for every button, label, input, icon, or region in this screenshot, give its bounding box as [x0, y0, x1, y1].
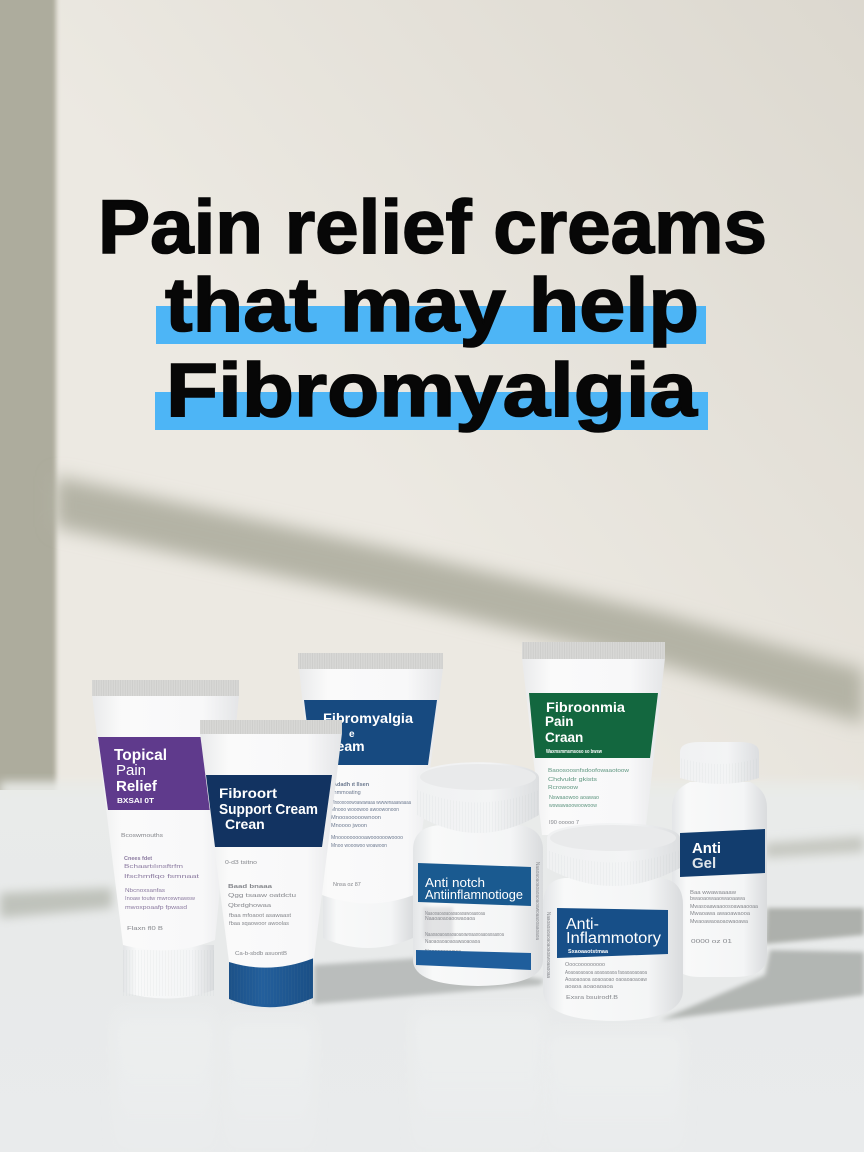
small print: Exsra bsuirodf.B	[566, 995, 618, 1001]
small print: Aoaoaoaoa aoaoaoao oaoaoaoaoaw	[565, 977, 647, 983]
cap	[123, 945, 214, 999]
small print: Mnoooo jwoon	[331, 823, 367, 829]
bottle: Anti Gel	[672, 742, 767, 977]
small print: Naaoaoaoaoowaoaoa	[425, 916, 476, 922]
band text: Fibroonmia	[546, 700, 626, 715]
jar: Anti-Inflammatory large	[543, 823, 683, 1021]
small print: Mnoosooooownoon	[331, 815, 381, 821]
small print: Naaoaoaoaoaoaoaoawoaaooaa	[545, 912, 551, 979]
band text: Relief	[116, 778, 158, 795]
jar cap	[417, 762, 539, 833]
band text: Waxmsmmsmsoso so bwsw	[546, 749, 603, 755]
small print	[423, 862, 540, 955]
small print: Adadh ıt Ilsen	[333, 782, 370, 788]
label text	[425, 875, 523, 902]
crimp	[200, 720, 342, 734]
small print: fbaa sqaowoor awoolas	[229, 921, 289, 927]
small print: Mwaoawa awaoawaooa	[690, 911, 751, 917]
jar body	[543, 878, 683, 1021]
label text: Anti notch	[425, 875, 485, 890]
small print: Naaooaoaoaoaoaoaoawoaaooaa	[425, 911, 486, 917]
crimp	[298, 653, 443, 669]
body	[522, 658, 665, 835]
band text: Fibroort	[219, 785, 277, 801]
small print: Baa wwawaaaaw	[690, 890, 736, 896]
blue label	[418, 863, 531, 906]
small print: Naaoaoaoaoaoaoaoawoaaooaaoaoaaooa	[425, 932, 505, 938]
small print: Aoaoaoaoaoa aoaoaoaoa faoaoaoaoaoa	[565, 970, 648, 976]
small print: I90 ooooo 7	[549, 820, 579, 826]
navy band	[206, 775, 332, 847]
label text: Sxaoaaotstmaa	[568, 949, 609, 955]
label text	[566, 916, 661, 955]
small print: Ifschmflqo fsmnaat	[124, 874, 200, 880]
tube: Topical Pain Relief	[92, 680, 239, 999]
small print: aoaoa aoaoaoaoa	[565, 984, 614, 990]
navy band	[304, 700, 437, 765]
small print: mmmoating	[332, 790, 361, 796]
small print: Chdvuldr gkists	[548, 777, 597, 783]
crimp	[522, 642, 665, 659]
small print: bwaoaowaaowaoaawa	[690, 896, 746, 902]
blue bottom strip	[416, 950, 531, 970]
small print: wswawaoowoowoow	[548, 803, 597, 809]
small print: Bchaartılınsftrfm	[124, 864, 184, 870]
small print: Naaoaoaoaoaoaoaoawoaaooaaoaoa	[534, 862, 540, 941]
small print: Mwasoaawaaoosoawaaooaa	[690, 904, 759, 910]
title text: Fibromyalgia	[166, 348, 698, 433]
small print: mwoxpoaafp fpwasd	[125, 905, 187, 911]
small print	[121, 833, 200, 932]
small print: Ca-b-sbdb asuontB	[235, 951, 287, 957]
small print: Nswaaowoo aoawao	[549, 795, 599, 801]
small print: Nbcnoxsanfas	[125, 888, 165, 894]
band text	[219, 785, 318, 832]
band text: e	[349, 729, 355, 740]
body	[92, 695, 239, 950]
band text: Pain	[545, 714, 574, 729]
band text	[114, 747, 167, 805]
title text: that may help	[165, 263, 699, 348]
blue label	[557, 908, 668, 958]
label text: Antiinflamnotioge	[425, 888, 523, 902]
tube: Fibromyalgia Cream (back)	[298, 653, 443, 948]
small print: Cnees fdet	[124, 856, 152, 862]
reflections	[115, 1005, 215, 1152]
small print: Naoaoaoaoaoawaoaoaoa	[425, 939, 481, 945]
band text: Topical	[114, 747, 167, 764]
label text	[692, 840, 721, 872]
small print: Baoosoosnfsdoofowaaotoow	[548, 768, 629, 774]
small print: Nnsa oz 87	[333, 882, 361, 888]
small print: 0-d3 tsitno	[225, 860, 257, 866]
small print	[225, 860, 296, 957]
jar: Anti-inflammatory small label	[413, 762, 543, 986]
label text: Anti	[692, 840, 721, 857]
small print: Rcrowoow	[548, 785, 578, 791]
tube: Fibroort Support Cream	[200, 720, 342, 1007]
wall background	[0, 0, 864, 810]
band text: Crean	[225, 816, 265, 832]
table surface	[0, 782, 864, 1152]
band text	[321, 710, 413, 754]
band text: Support Cream	[219, 801, 318, 818]
body	[672, 782, 767, 977]
small print: Inoaw toutw mwroxwnawsw	[125, 896, 195, 902]
small print: 0000 oz 01	[691, 939, 732, 945]
band text: Craan	[545, 730, 583, 745]
small print	[548, 768, 629, 826]
blue cap	[229, 958, 313, 1007]
small print: Ooocooooooooo	[565, 962, 605, 968]
title	[98, 185, 767, 433]
small print	[545, 912, 648, 1001]
title text	[98, 185, 767, 433]
navy label	[680, 829, 765, 877]
crimp	[92, 680, 239, 696]
purple band	[98, 737, 212, 810]
body	[200, 733, 342, 968]
small print: Qgg tsaaw oatdctu	[228, 893, 296, 899]
body	[299, 668, 443, 904]
small print: fbaa mfoaoot asawaast	[229, 913, 292, 919]
small print: Bcoswmouths	[121, 833, 163, 839]
band text: Cream	[321, 738, 365, 754]
title text: Pain relief creams	[98, 185, 767, 270]
small print: Naaoaoaoaowa	[425, 949, 462, 955]
small print	[331, 782, 412, 888]
tube: Fibroonmia Pain Cream	[522, 642, 665, 835]
green band	[529, 693, 658, 758]
band text: BXSAI 0T	[117, 796, 154, 805]
jar body	[413, 825, 543, 986]
band text	[545, 700, 626, 755]
small print: Mnoooooowoawawaaa wwwwnaaawaaaa	[331, 800, 412, 806]
cap	[323, 895, 413, 948]
band text: Pain	[116, 762, 146, 779]
band text: Fibromyalgia	[323, 710, 413, 726]
small print: Qbrdghowaa	[228, 903, 272, 909]
small print: Mnoooooooooawoooooowoooo	[331, 835, 403, 841]
small print: Mnoo wooowoo woawoon	[331, 843, 387, 849]
label text: Gel	[692, 855, 716, 872]
cap	[680, 742, 759, 784]
small print: Mnooo wooowoo awoowonoon	[331, 807, 399, 813]
jar cap	[547, 823, 680, 886]
label text: Anti-	[566, 916, 599, 933]
highlight bar: line 2	[156, 306, 706, 344]
small print: Baad bnaaa	[228, 884, 273, 890]
highlight bar: line 3	[155, 392, 708, 430]
small print	[690, 890, 759, 945]
small print: Mwaoawaoaoaowaoawa	[690, 919, 749, 925]
label text: Inflammotory	[566, 930, 661, 947]
small print: Flaxn fl0 B	[127, 926, 163, 932]
